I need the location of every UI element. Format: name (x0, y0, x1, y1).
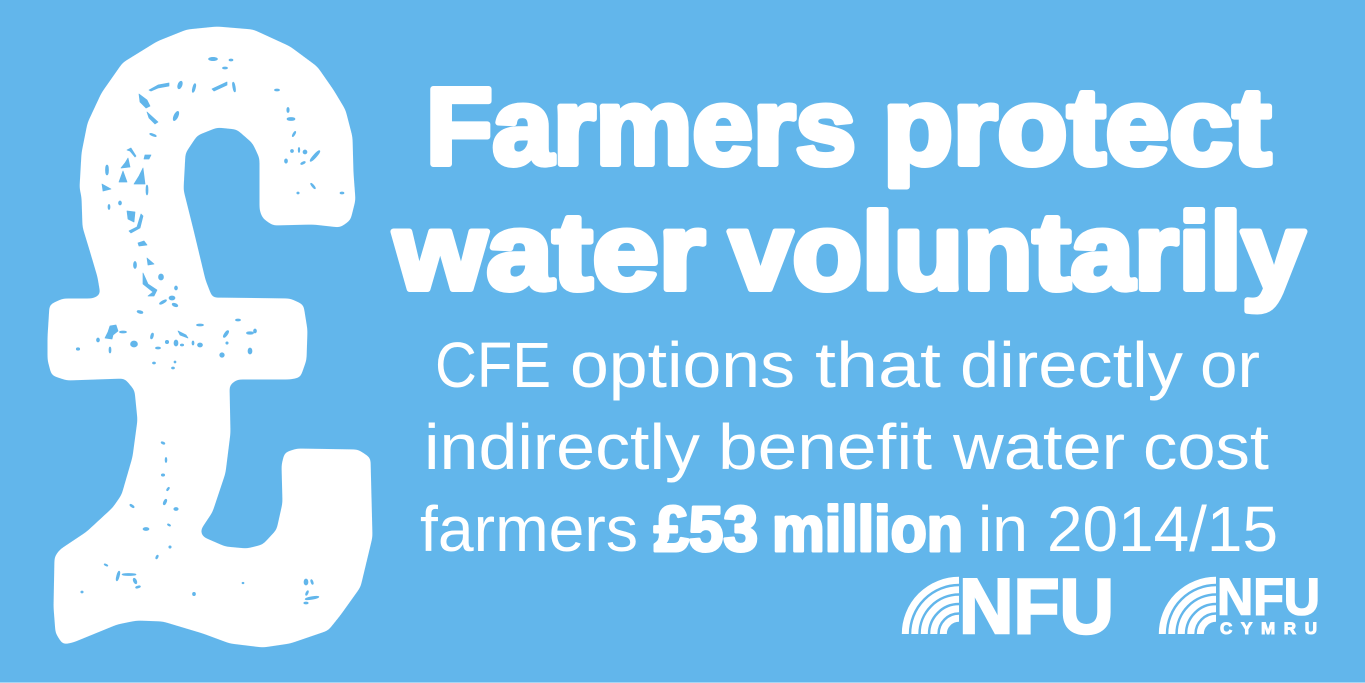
logo: NFU Cymru: CYMRU (1220, 619, 1317, 638)
subheading text: indirectly (424, 411, 700, 483)
subheading text: or (1200, 329, 1260, 401)
subheading text: million (772, 493, 963, 565)
logo: NFU Cymru (1162, 568, 1320, 638)
title: water (393, 191, 705, 313)
icon: distressed pound sign (48, 27, 372, 647)
title: Farmers (426, 66, 856, 188)
subheading text: cost (1143, 411, 1269, 483)
subheading text: directly (960, 329, 1183, 401)
subheading text (420, 329, 1278, 565)
subheading text: 2014/15 (1047, 493, 1278, 565)
subheading text: benefit (718, 411, 932, 483)
subheading text: water (952, 411, 1125, 483)
subheading text: £53 (654, 493, 758, 565)
subheading text: that (815, 329, 941, 401)
title: voluntarily (729, 191, 1305, 313)
subheading text: options (570, 329, 795, 401)
logo: NFU Cymru: NFU (1217, 568, 1320, 626)
subheading text: farmers (420, 493, 638, 565)
title (393, 66, 1305, 313)
title: protect (883, 66, 1271, 188)
subheading text: CFE (435, 329, 551, 401)
subheading text: in (978, 493, 1028, 565)
logo: NFU: NFU (959, 562, 1114, 650)
